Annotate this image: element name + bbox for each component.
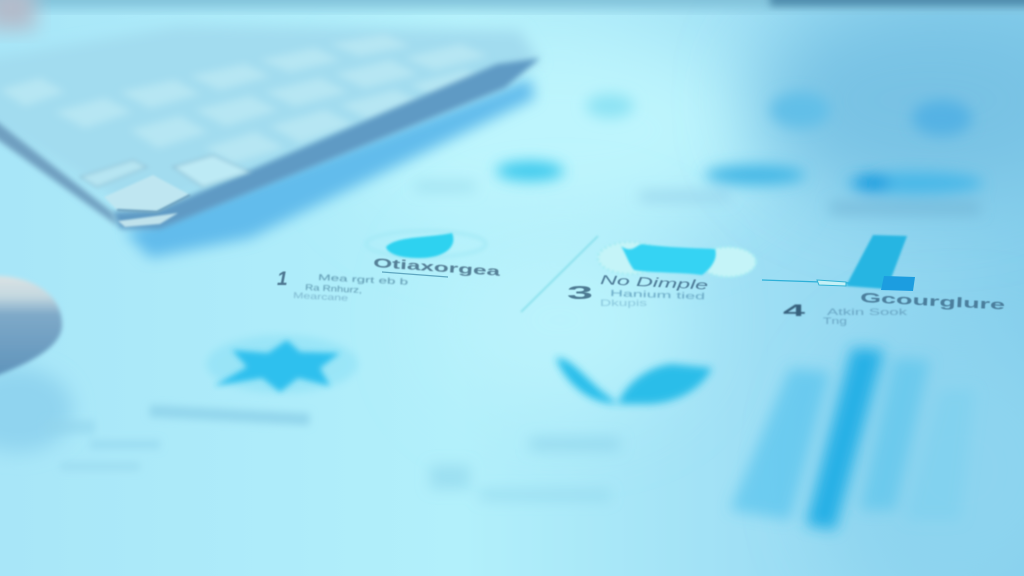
number 4: 4 (783, 301, 806, 320)
chart: bars (762, 235, 915, 291)
chart: large blurred bars (730, 348, 975, 530)
icon: top right (847, 172, 983, 194)
text block: item 3: Dkupis (600, 298, 648, 308)
text block: item 4: Tng (823, 316, 847, 326)
text block: item 1 (293, 272, 409, 303)
text block: lower row middle (430, 438, 620, 500)
keyboard (0, 26, 540, 258)
icon: far right (770, 92, 830, 128)
icon: pot with dots (598, 242, 756, 277)
panel: lower row check icon (556, 358, 712, 404)
panel 2: upper row item 3 (567, 242, 756, 308)
heading: item 3: No Dimple (600, 273, 708, 293)
heading: item 1: Otiaxorgea (373, 255, 502, 279)
icon: right spot (854, 174, 890, 192)
number 3: 3 (567, 283, 593, 303)
divider line (521, 236, 598, 312)
panel: lower row blurred star icon (206, 335, 358, 393)
text block: item 4: Atkin Sook (827, 307, 908, 317)
text: top row strip 3 (415, 182, 475, 191)
icon: top right left (705, 165, 805, 185)
mouse shadow (0, 368, 73, 452)
icon: far right 2 (912, 100, 972, 136)
panel: top row blurred icons (415, 92, 983, 214)
keyboard shadow (125, 78, 535, 258)
icon: top centre (496, 161, 564, 181)
text block: item 3 (600, 288, 705, 308)
text block: item 1: Mearcane (293, 290, 349, 303)
icon: drop ring (366, 231, 486, 258)
icon: top far (586, 94, 634, 118)
text block: item 3: Hanium tied (610, 288, 705, 301)
text: top row strip (640, 192, 730, 201)
mouse (0, 276, 73, 452)
panel 3: upper row item 4 (762, 235, 1006, 326)
keyboard body (0, 26, 540, 215)
mouse body (0, 276, 62, 378)
keyboard front keys (80, 155, 250, 212)
number 1: 1 (277, 269, 288, 290)
text block: item 4 (823, 307, 908, 326)
keyboard blurred key rows (0, 34, 492, 164)
heading: item 4: Gcourglure (860, 289, 1006, 313)
text block: item 1: Ra Rnhurz, (305, 282, 362, 295)
text block: item 1: Mea rgrt eb b (318, 272, 409, 287)
text: top row strip 2 (830, 202, 980, 214)
text block: lower row left (45, 405, 310, 471)
panel 1: upper row item 1 (277, 231, 502, 303)
underline (382, 272, 448, 277)
keyboard front edge (0, 58, 540, 229)
